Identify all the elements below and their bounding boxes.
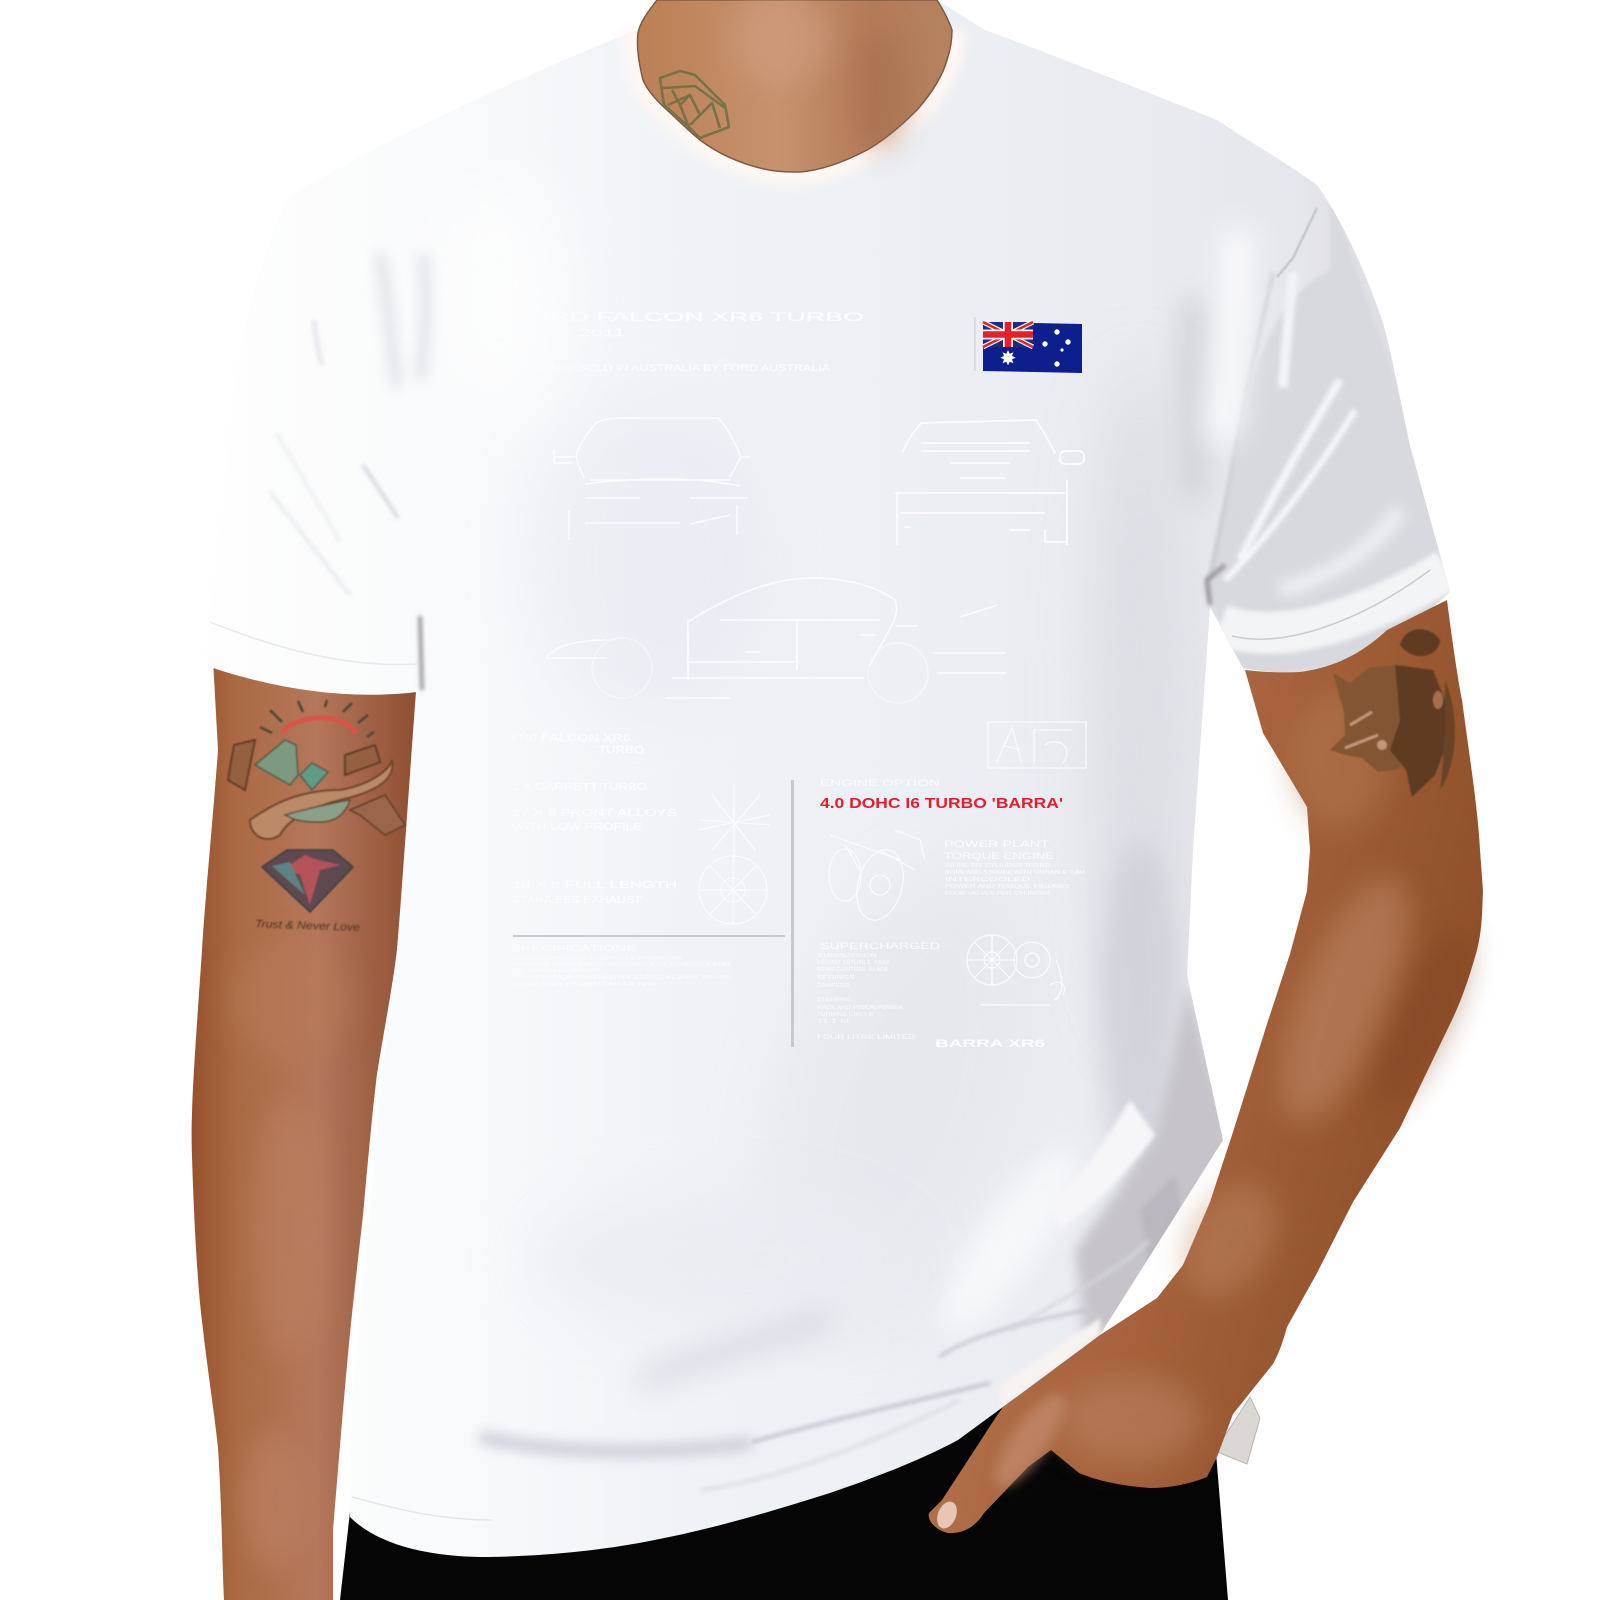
specifications text: FORD AUSTRALIA PERFORMANCE SEDAN BUILT AT BROADMEADOWS [511,956,681,962]
shading clipped to the shirt [210,180,1470,1520]
icon: diamond [262,850,353,912]
blueprint: car rear view [895,420,1084,545]
icon: sun [282,718,356,733]
section heading: XR6 Turbo: WITH LOW PROFILE [512,822,642,833]
supercharged specs: FRONT DOUBLE ARM [817,960,890,966]
print title [512,310,864,373]
right sleeve shading [1192,190,1470,680]
power plant text: POWER AND TORQUE FIGURES [945,884,1070,890]
power plant text: POWER PLANT [944,839,1050,849]
supercharged specs: SUPERCHARGED [820,941,941,951]
left sleeve creases [210,254,426,690]
shaded side panel near right forearm [1075,985,1235,1345]
power plant text: BORE AND STROKE WITH VARIABLE CAM [945,870,1086,876]
supercharged specs: DAMPERS [817,983,849,989]
Australian flag: ✸ [1000,348,1016,370]
engine label: ENGINE OPTION [820,778,940,788]
specifications text: SIX SPEED GEARBOX [511,968,601,974]
supercharged specs: SPRINGS [817,975,855,981]
supercharged specs: RACK AND PINION POWER [817,1005,903,1011]
right arm and hand in pocket [929,600,1488,1533]
badge sketches box [988,722,1086,768]
power plant text: INLINE SIX CYLINDER TURBO [945,863,1051,869]
section heading: XR6 Turbo: TURBO [598,745,644,756]
soft shading on the chest and stomach [430,180,1190,1365]
supercharged specs [817,941,941,1041]
left arm tattoos [228,700,405,934]
power plant text: TORQUE ENGINE [944,851,1054,861]
section heading: XR6 Turbo: 17 X 8 FRONT ALLOYS [512,808,677,819]
pulley diagrams [967,935,1065,1005]
vertical divider [791,780,794,1047]
engine name in red: 4.0 DOHC I6 TURBO 'BARRA' [820,795,1063,812]
folds at bottom of shirt [352,1240,1150,1520]
specifications text: SPECIFICATIONS [511,944,636,953]
white t-shirt body and sleeves [205,0,1470,1557]
section heading: XR6 Turbo: 18 X 8 FULL LENGTH [512,880,677,891]
white hem below shaded panel [1000,1318,1100,1407]
print title: BUILT AND SOLD IN AUSTRALIA BY FORD AUSTRALIA [512,363,830,373]
supercharged specs: SUSPENSION [817,953,877,959]
section heading: XR6 Turbo: XR6 FALCON XR6 [509,733,632,744]
Australian flag [974,317,1082,373]
horizontal divider [513,935,785,937]
rolled shirt fabric behind wrist [1215,1397,1260,1464]
printed blueprint graphic on chest [509,310,1086,1050]
blueprint: car side view [546,578,1006,703]
power plant text: INTERCOOLED [945,877,1030,883]
supercharged specs: REAR CONTROL BLADE [817,967,889,973]
specifications text: INDEPENDENT REAR SUSPENSION WITH CONTROL BLADE AND LIMITED SLIP DIFF [511,962,732,968]
left arm [192,660,420,1600]
supercharged specs: FOUR LITRE LIMITED [817,1035,916,1041]
icon: ribbon banner [250,760,392,839]
icon: wolf and tribal tattoo on right arm [1330,629,1455,797]
section heading: XR6 Turbo: STAINLESS EXHAUST [512,895,642,906]
print title: 2002 - 2011 [513,328,626,339]
supercharged specs: 11.1 M [817,1019,850,1025]
blueprint: car front view [554,418,750,540]
dark trousers [340,1395,1228,1600]
specifications text: TWIN PISTON FRONT BRAKES AND VENTED DISCS ALL ROUND WITH ABS [511,975,731,981]
icon: green gems [255,740,298,785]
power plant text [944,839,1086,897]
specifications text [511,944,732,988]
power plant text: FOUR VALVES PER CYLINDER [945,891,1050,897]
supercharged specs: STEERING [817,997,851,1003]
tattoo script: Trust & Never Love [255,918,360,934]
wheel and suspension diagrams [698,785,770,924]
section heading: XR6 Turbo: 1 X GARRETT TURBO [512,782,647,793]
barra logo: BARRA XR6 [935,1038,1045,1050]
supercharged specs: TURNING CIRCLE [817,1012,873,1018]
turbo diagram [829,830,925,925]
neck [636,0,952,172]
section heading: XR6 Turbo [509,733,677,906]
print title: FORD FALCON XR6 TURBO [513,310,864,324]
icon: fingernail [933,1499,961,1531]
icon: neck gem tattoo [660,71,729,138]
specifications text: SPORT BODY KIT AND LEATHER TRIM [511,982,657,988]
